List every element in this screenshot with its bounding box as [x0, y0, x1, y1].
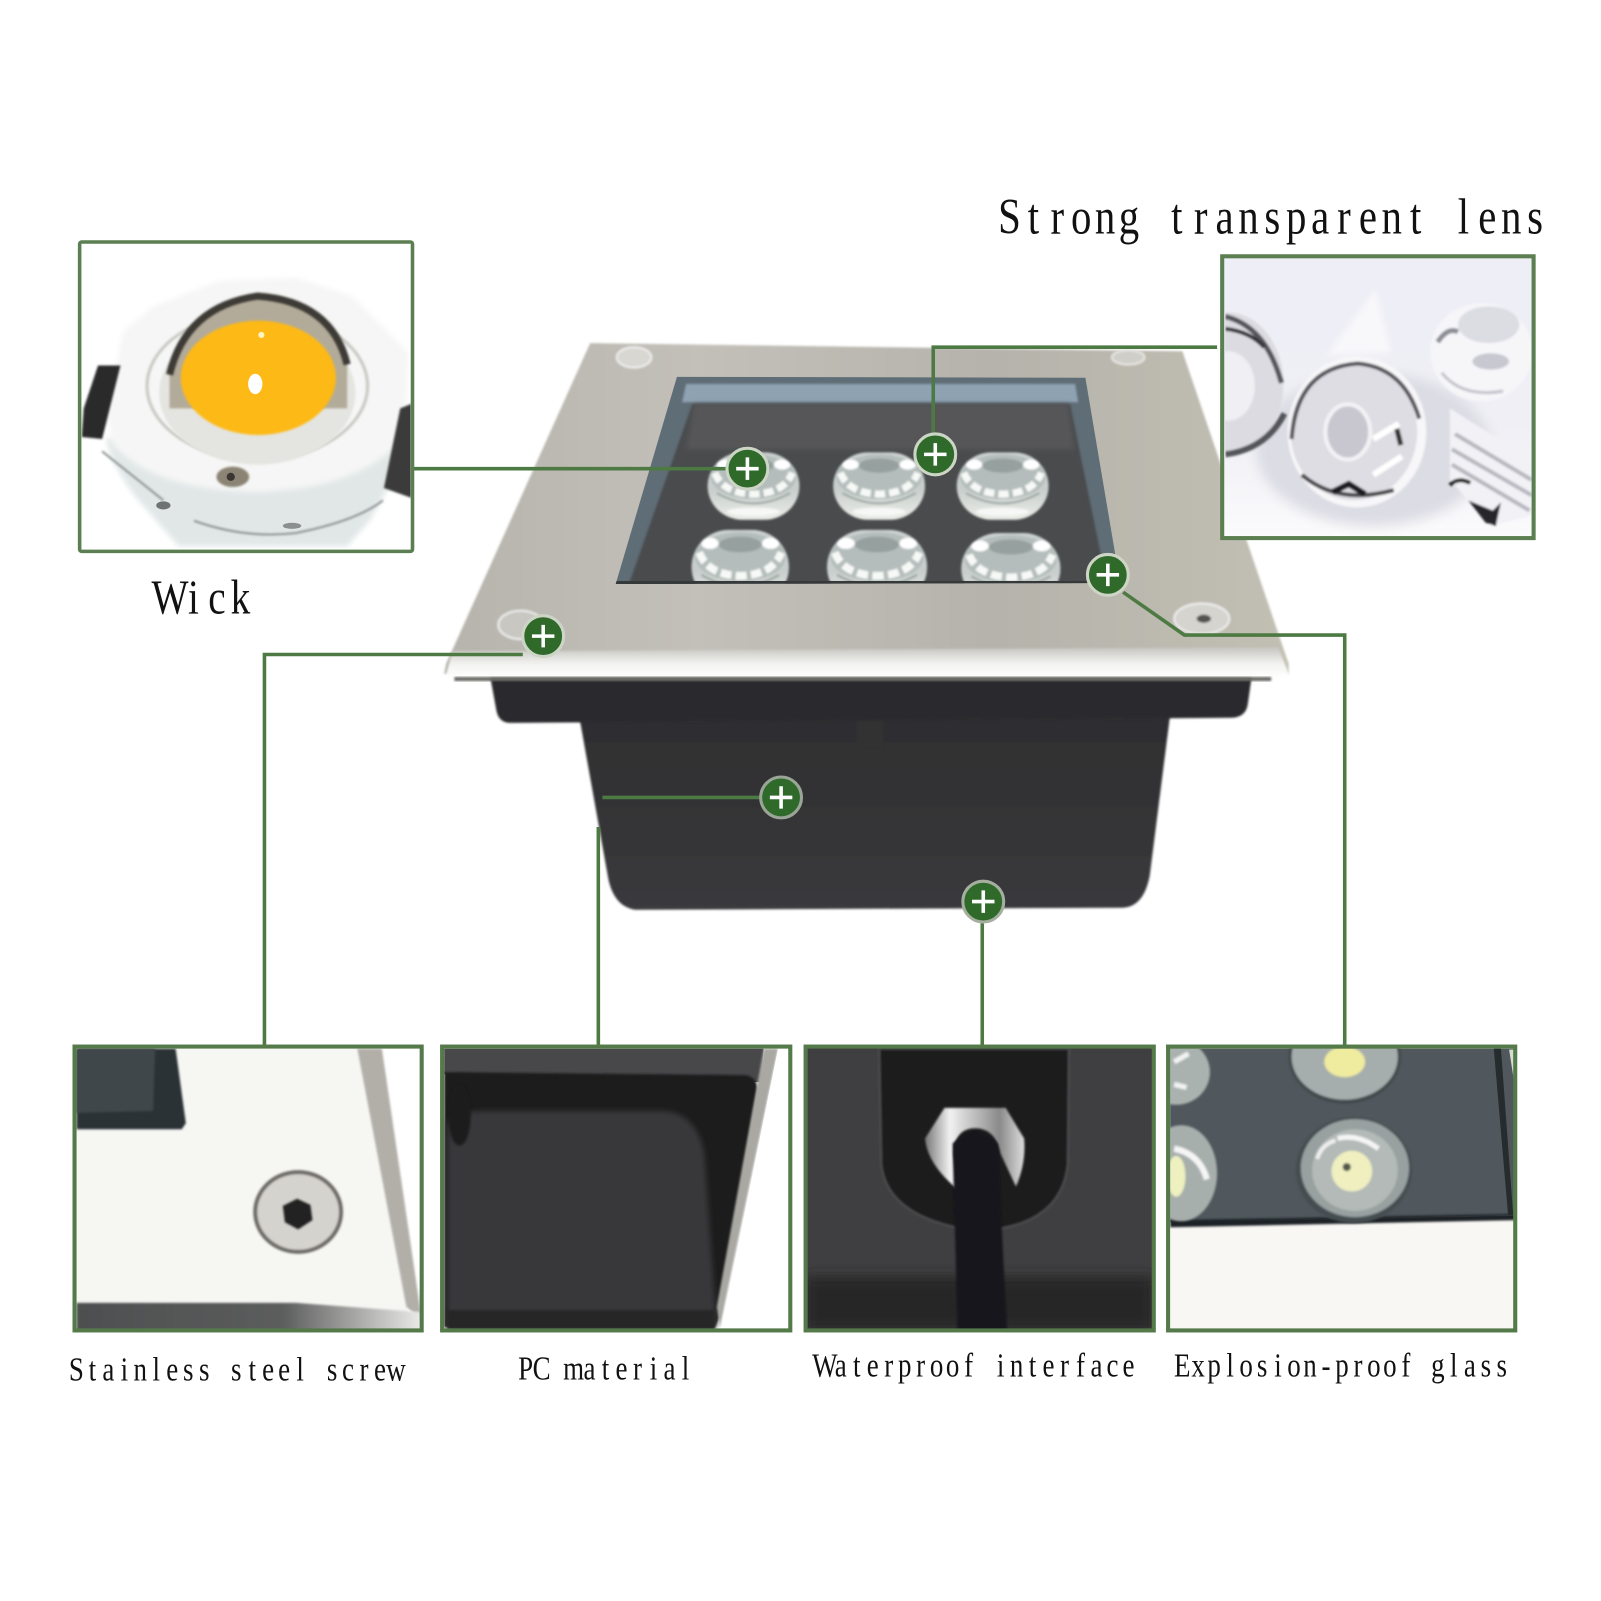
window blue reflection — [682, 384, 1078, 402]
right light sliver — [1509, 1050, 1514, 1082]
small holes — [156, 501, 171, 510]
marker: waterproof — [963, 881, 1004, 922]
lamp flange — [490, 676, 1252, 723]
connector: PC material — [598, 797, 761, 1048]
chip top dot — [258, 332, 264, 338]
plate bevel — [357, 1049, 422, 1319]
left knob — [448, 1084, 471, 1146]
yellow chip — [181, 321, 336, 435]
heading: strong transparent lens: Strong transparent lens — [998, 188, 1543, 244]
panel: stainless steel screw — [75, 1047, 422, 1330]
lens top row — [708, 452, 799, 520]
plate edge shadow — [454, 677, 1271, 681]
cable — [953, 1132, 1007, 1330]
U recess — [879, 1049, 1069, 1229]
hex socket — [283, 1199, 312, 1229]
bottom edge — [77, 1303, 421, 1330]
dark ring arc — [169, 296, 347, 375]
screw bottom right — [1174, 603, 1229, 634]
panel: wick — [80, 242, 413, 551]
panel: explosion-proof glass — [1143, 1010, 1515, 1330]
label: explosion-proof glass: Explosion-proof glass — [1174, 1347, 1507, 1384]
plate bright lip — [445, 647, 1291, 678]
seams — [102, 451, 383, 535]
right frame line — [1494, 1049, 1513, 1215]
panel: lens — [1220, 254, 1536, 540]
glass bottom edge — [1170, 1214, 1515, 1227]
left lens lower — [1146, 1125, 1217, 1221]
lamp product photo — [444, 343, 1291, 910]
label: stainless steel screw: Stainless steel screw — [69, 1351, 406, 1388]
screw head — [255, 1172, 341, 1252]
lens ring — [169, 296, 347, 408]
label: wick: Wick — [152, 569, 251, 625]
right connector — [384, 403, 413, 498]
centre lens — [1296, 1117, 1412, 1223]
label: waterproof interface: Waterproof interface — [812, 1347, 1134, 1384]
bottom shade — [806, 1276, 1154, 1330]
top lens — [1289, 1010, 1401, 1104]
side edge — [717, 1049, 778, 1327]
marker: glass — [1087, 554, 1128, 595]
glass window — [616, 376, 1116, 584]
centre lens tip — [1335, 298, 1386, 352]
connector: wick — [413, 467, 727, 470]
window bottom edge — [613, 581, 1123, 584]
housing notch — [858, 721, 884, 745]
connector: waterproof interface — [980, 922, 984, 1048]
connector: explosion-proof glass — [1123, 592, 1345, 1048]
concentric rings — [144, 326, 370, 450]
chip spot — [248, 374, 262, 394]
panel: PC material — [442, 1047, 791, 1330]
left lens — [1225, 312, 1288, 459]
screw top left — [617, 347, 651, 368]
connector: stainless steel screw — [264, 654, 523, 1048]
stainless steel plate — [444, 343, 1289, 674]
housing top band — [444, 1049, 764, 1082]
marker: PC material — [761, 777, 802, 818]
lamp housing lower box — [579, 715, 1170, 910]
centre lens — [1288, 356, 1426, 507]
right lens ball — [1435, 306, 1519, 400]
marker: screw — [523, 616, 564, 657]
white corner — [721, 1049, 791, 1330]
right ribbed lens — [1450, 408, 1532, 526]
label: PC material: PC material — [518, 1350, 689, 1387]
window corner — [77, 1049, 186, 1129]
plate surface — [77, 1049, 408, 1317]
module lower body — [106, 438, 392, 548]
black side tab — [82, 366, 120, 439]
marker: wick — [727, 448, 768, 489]
connector: lens — [933, 347, 1217, 435]
panel: waterproof interface — [806, 1047, 1154, 1330]
window inner top shade — [686, 404, 1074, 449]
left lens upper — [1143, 1039, 1210, 1105]
marker: lens — [915, 434, 956, 475]
module top face — [108, 278, 408, 492]
bottom shade — [447, 1310, 715, 1329]
glass dark area — [1170, 1049, 1515, 1222]
screw bottom left — [498, 611, 543, 639]
wire bond pad — [216, 467, 249, 487]
metal nut — [925, 1108, 1024, 1190]
lens bottom row — [690, 528, 790, 584]
window inner dark — [629, 404, 1107, 584]
dark band — [444, 1072, 758, 1327]
main face — [447, 1111, 717, 1327]
screw top right — [1112, 350, 1145, 365]
backdrop soft shade — [1256, 373, 1491, 526]
